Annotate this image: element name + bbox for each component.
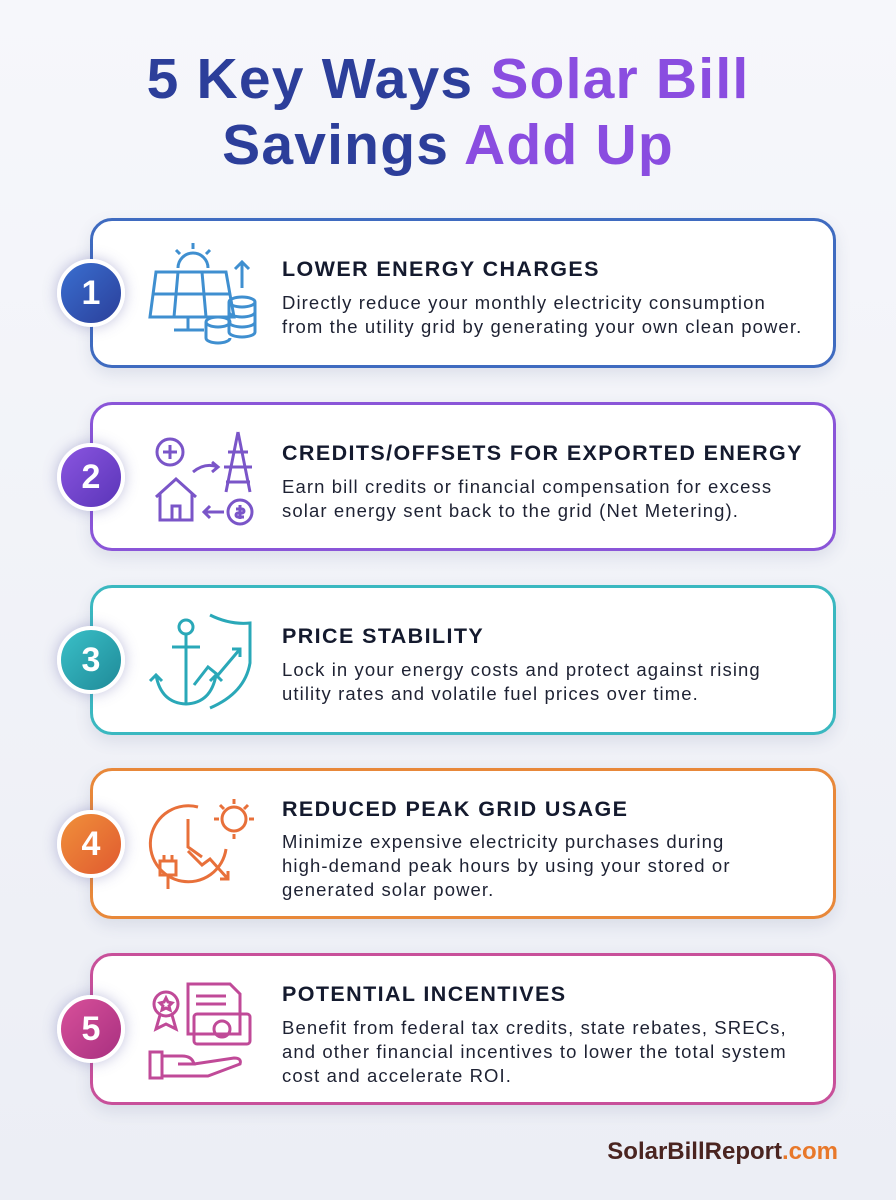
title: 5 Key Ways Solar Bill [147,47,749,111]
text: Earn bill credits or financial compensation for excess [282,476,772,497]
panel: potential incentives [90,953,836,1105]
title: Savings Add Up [222,113,674,177]
panel: price stability [90,585,836,735]
heading: REDUCED PEAK GRID USAGE [282,797,628,821]
footer brand: SolarBillReport.com [607,1138,838,1165]
text [282,659,761,704]
text: and other financial incentives to lower the total system [282,1041,787,1062]
text: Benefit from federal tax credits, state rebates, SRECs, [282,1017,787,1038]
icon: anchor and shield [149,614,252,710]
panel: credits for exported energy [90,402,836,551]
text [282,476,772,521]
badge 5: 5 [82,1010,100,1048]
text: Minimize expensive electricity purchases during [282,831,724,852]
panel: reduced peak grid usage [90,768,836,919]
badge 3 [57,626,125,694]
text: Directly reduce your monthly electricity consumption [282,292,766,313]
badge 4: 4 [82,824,100,862]
badge 1 [57,259,125,327]
badge 1: 1 [82,274,100,312]
icon: clock, sun, plug [148,799,254,889]
text: generated solar power. [282,879,494,900]
badge 2 [57,442,125,510]
badge 3: 3 [82,641,100,679]
text: from the utility grid by generating your own clean power. [282,316,802,337]
icon: house grid exchange [155,432,254,526]
icon: solar panel and coins [148,243,256,344]
text: cost and accelerate ROI. [282,1065,512,1086]
text [282,831,731,900]
badge 5 [57,995,125,1063]
text: high-demand peak hours by using your stored or [282,855,731,876]
heading: PRICE STABILITY [282,624,484,648]
heading: POTENTIAL INCENTIVES [282,982,566,1006]
heading: LOWER ENERGY CHARGES [282,257,600,281]
title [147,47,749,177]
heading: CREDITS/OFFSETS FOR EXPORTED ENERGY [282,441,803,465]
text: utility rates and volatile fuel prices over time. [282,683,699,704]
text [282,292,802,337]
panel: lower energy charges [90,218,836,368]
badge 2: 2 [82,458,100,496]
text: solar energy sent back to the grid (Net Metering). [282,500,739,521]
text: Lock in your energy costs and protect against rising [282,659,761,680]
text [282,1017,787,1086]
badge 4 [57,810,125,878]
icon: certificate, money, hand [148,982,252,1080]
